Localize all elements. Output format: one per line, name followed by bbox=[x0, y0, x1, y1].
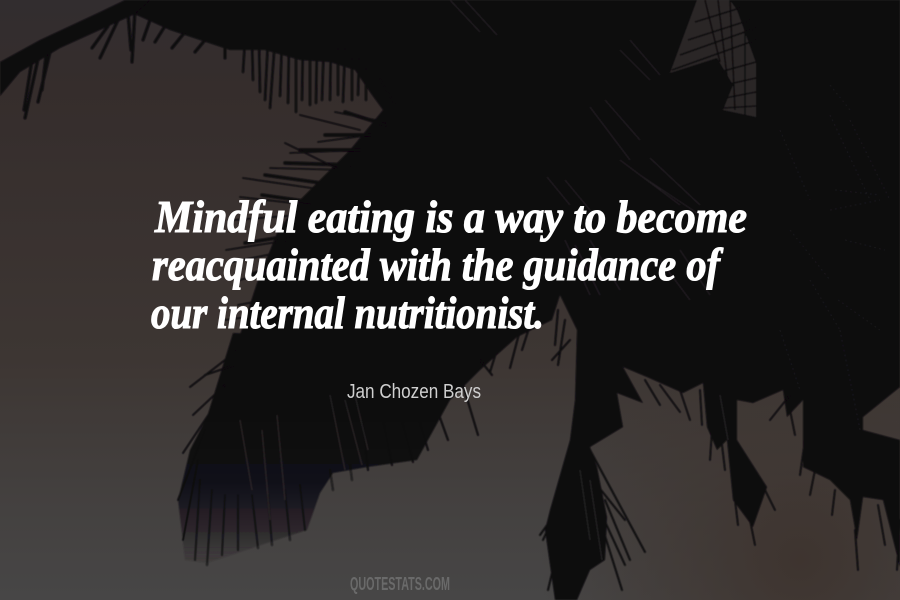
quote line 3: our internal nutritionist. bbox=[151, 287, 544, 338]
gap in the crown: sky through the leaves bbox=[670, 0, 756, 117]
leaf stripes over the gap bbox=[672, 0, 756, 115]
top left frond stem bbox=[0, 0, 150, 96]
lighter stripes inside the lower frond bbox=[240, 395, 728, 560]
quote text bbox=[151, 191, 747, 338]
author: Jan Chozen Bays bbox=[347, 381, 481, 403]
spikes between the lower frond and the hanging frond bbox=[360, 310, 570, 470]
lower frond fringe bbox=[195, 465, 352, 565]
watermark: QUOTESTATS.COM bbox=[350, 574, 450, 594]
crown spikes on upper left bbox=[225, 75, 395, 320]
fringe on the right fronds bbox=[645, 380, 900, 570]
quote line 1: Mindful eating is a way to become bbox=[154, 191, 747, 242]
tip of hanging frond bbox=[540, 450, 645, 590]
lower frond outer spikes bbox=[178, 350, 238, 540]
faint streaks in the crown bbox=[450, 0, 890, 430]
quote line 2: reacquainted with the guidance of bbox=[152, 239, 724, 290]
top left frond leaves bbox=[24, 10, 366, 118]
lower left frond bbox=[178, 333, 480, 563]
